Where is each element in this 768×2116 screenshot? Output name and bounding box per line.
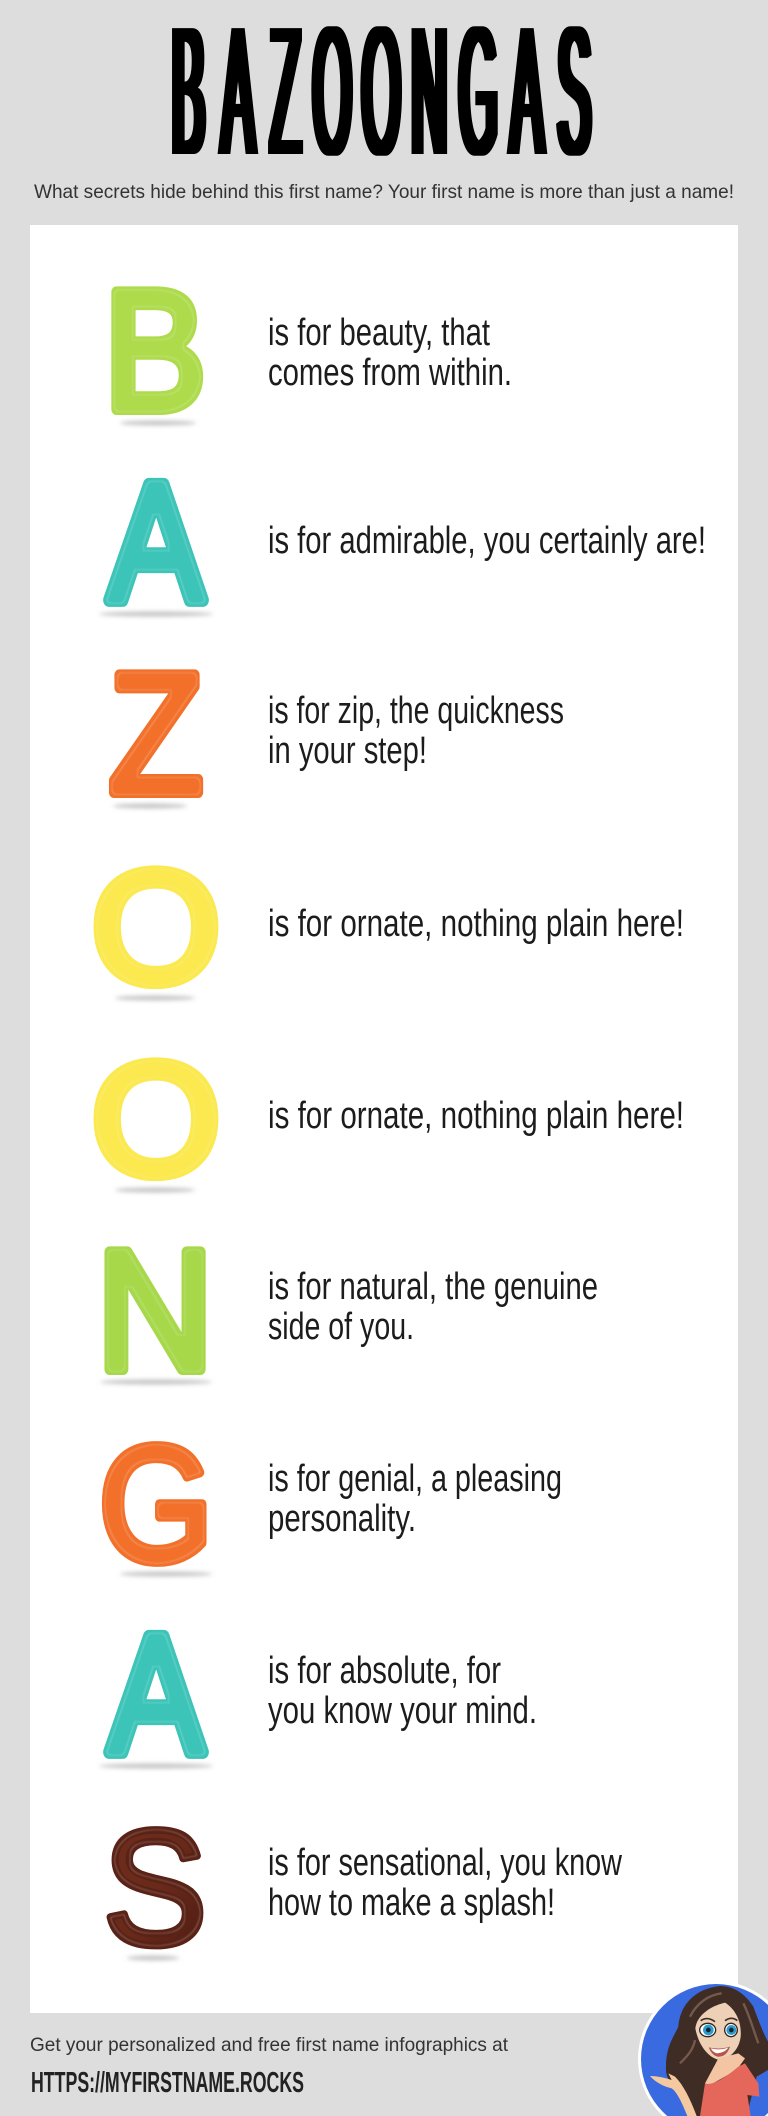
- text: G line: is for genial, a pleasing: [268, 1458, 562, 1500]
- icon: letter S: S: [103, 1797, 207, 1979]
- icon: letter Z: Z: [109, 639, 203, 829]
- row: A: [99, 448, 706, 636]
- row: G: [99, 1413, 562, 1596]
- text: Z line: is for zip, the quickness: [268, 690, 564, 732]
- row: O: [91, 839, 684, 1016]
- text: N line: side of you.: [268, 1306, 414, 1348]
- text: A second line: [268, 1650, 537, 1732]
- row: B: [104, 256, 512, 446]
- icon: avatar woman: [638, 1981, 768, 2116]
- icon: letter A second: A: [109, 1600, 204, 1788]
- text: B line: [268, 312, 512, 394]
- text: B line: is for beauty, that: [268, 312, 490, 354]
- footer link: HTTPS://MYFIRSTNAME.ROCKS: [31, 2067, 304, 2099]
- panel: letters: [30, 225, 738, 2013]
- text: S line: [268, 1842, 622, 1924]
- text: S line: how to make a splash!: [268, 1882, 555, 1924]
- row: A second: [99, 1600, 537, 1788]
- row: O second: [91, 1031, 684, 1208]
- row: N: [96, 1216, 598, 1406]
- text: N line: [268, 1266, 598, 1348]
- text: A second line: you know your mind.: [268, 1690, 537, 1732]
- icon: letter A: A: [109, 448, 204, 636]
- text: B line: comes from within.: [268, 352, 512, 394]
- text: G line: [268, 1458, 562, 1540]
- subtitle: What secrets hide behind this first name? Your first name is more than just a name!: [34, 181, 734, 203]
- row: S: [103, 1797, 622, 1979]
- text: S line: is for sensational, you know: [268, 1842, 622, 1884]
- text: N line: is for natural, the genuine: [268, 1266, 598, 1308]
- icon: letter B: B: [104, 256, 206, 446]
- row: Z: [109, 639, 564, 829]
- text: A second line: is for absolute, for: [268, 1650, 501, 1692]
- icon: letter G: G: [99, 1413, 213, 1596]
- text: Z line: [268, 690, 564, 772]
- text: G line: personality.: [268, 1498, 416, 1540]
- icon: letter N: N: [96, 1216, 214, 1406]
- footer text: Get your personalized and free first name infographics at: [30, 2034, 509, 2056]
- icon: letter O second: O: [91, 1031, 221, 1208]
- icon: letter O: O: [91, 839, 221, 1016]
- text: Z line: in your step!: [268, 730, 427, 772]
